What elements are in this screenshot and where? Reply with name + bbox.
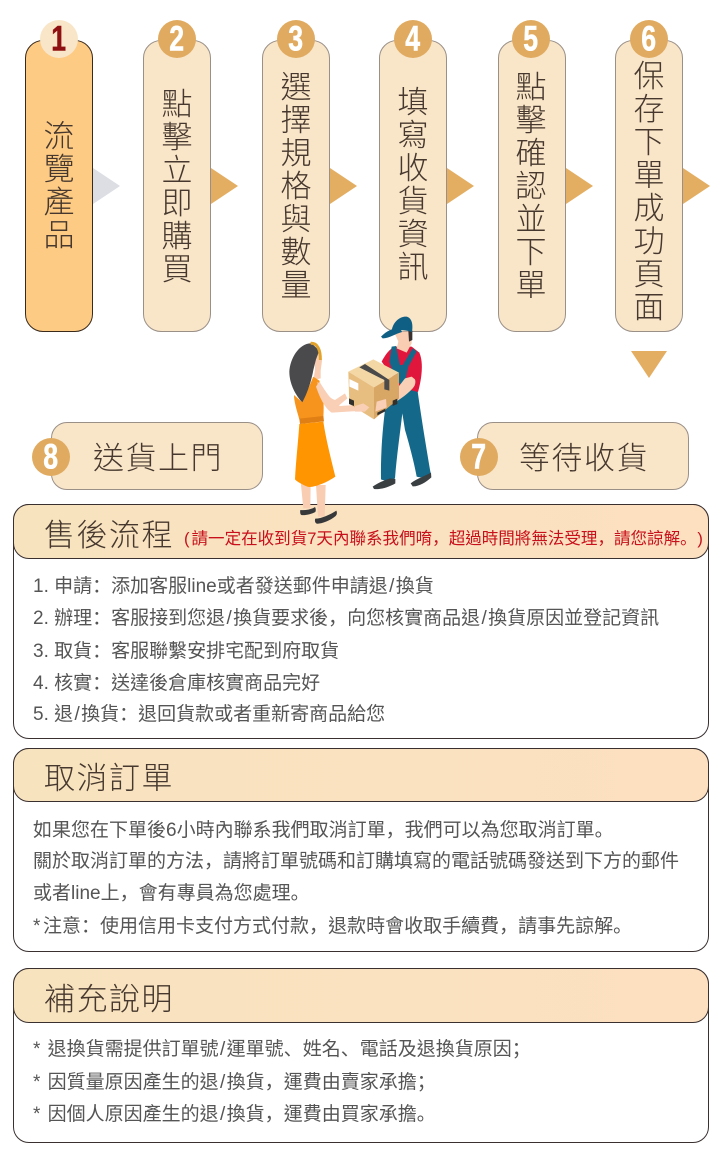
step 5 number badge bbox=[512, 20, 550, 58]
step 1 label: 產 bbox=[44, 185, 74, 220]
step 5 label: 點 bbox=[516, 70, 546, 105]
step 4 label: 寫 bbox=[398, 118, 428, 153]
step 1 label: 品 bbox=[44, 218, 74, 253]
step 3 label: 規 bbox=[280, 136, 312, 171]
cancel text line 3: 或者line上，會有專員為您處理。 bbox=[33, 883, 310, 904]
step 2 label: 購 bbox=[162, 219, 192, 254]
step 6 number badge: 6 bbox=[642, 18, 656, 58]
step 3 label: 量 bbox=[280, 268, 312, 303]
step 2 card bbox=[143, 40, 211, 332]
step 6 card bbox=[615, 40, 683, 332]
step 7: wait for delivery bbox=[460, 422, 689, 490]
step 6: order success page bbox=[615, 18, 683, 332]
note line 2: * 因質量原因產生的退/換貨，運費由賣家承擔； bbox=[33, 1072, 436, 1093]
cancel text line 1: 如果您在下單後6小時內聯系我們取消訂單，我們可以為您取消訂單。 bbox=[33, 820, 614, 841]
step 4 label: 收 bbox=[398, 151, 428, 186]
step 5 label bbox=[516, 70, 546, 303]
arrow: step 1 to 2 bbox=[93, 168, 120, 204]
step 6 label: 面 bbox=[634, 290, 664, 325]
arrow: step 3 to 4 bbox=[330, 168, 357, 204]
step list line 2: 2. 辦理：客服接到您退/換貨要求後，向您核實商品退/換貨原因並登記資訊 bbox=[33, 608, 659, 629]
step 3 number badge bbox=[277, 20, 315, 58]
after-sales header bar bbox=[13, 504, 709, 559]
step list line 3: 3. 取貨：客服聯繫安排宅配到府取貨 bbox=[33, 641, 339, 662]
step 3 label: 格 bbox=[280, 169, 312, 204]
step 4 card bbox=[379, 40, 447, 332]
step 7 card bbox=[477, 422, 689, 490]
notes header bar bbox=[13, 968, 709, 1023]
step 1: browse products bbox=[25, 18, 93, 332]
step 1 card bbox=[25, 40, 93, 332]
step 1 number badge bbox=[40, 20, 78, 58]
step 3 label: 數 bbox=[280, 235, 312, 270]
step 8: home delivery bbox=[32, 422, 263, 490]
step 4 label: 訊 bbox=[398, 250, 428, 285]
cancel text line 2: 關於取消訂單的方法，請將訂單號碼和訂購填寫的電話號碼發送到下方的郵件 bbox=[33, 851, 679, 872]
step 6 label: 下 bbox=[634, 125, 664, 160]
panel: cancel order bbox=[13, 748, 709, 952]
step 6 label bbox=[634, 59, 664, 325]
step 7 number badge bbox=[460, 438, 498, 476]
step list line 1: 1. 申請：添加客服line或者發送郵件申請退/換貨 bbox=[33, 576, 434, 597]
step 7 number badge: 7 bbox=[472, 436, 486, 476]
step 5 card bbox=[498, 40, 566, 332]
step 1 label bbox=[44, 119, 74, 253]
step 2 label: 點 bbox=[162, 87, 192, 122]
step 5: confirm order bbox=[498, 18, 566, 332]
cancel order header bar bbox=[13, 748, 709, 802]
arrow: step 2 to 3 bbox=[211, 168, 238, 204]
panel: additional notes bbox=[13, 968, 709, 1143]
step 2 label: 立 bbox=[162, 153, 192, 188]
step 5 number badge: 5 bbox=[524, 18, 538, 58]
step 5 label: 單 bbox=[516, 268, 546, 303]
step 4 label bbox=[398, 85, 428, 285]
step 6 label: 功 bbox=[634, 224, 664, 259]
step 2 label: 買 bbox=[162, 252, 192, 287]
step 4 label: 貨 bbox=[398, 184, 428, 219]
step 2 number badge: 2 bbox=[170, 18, 184, 58]
note line 1: * 退換貨需提供訂單號/運單號、姓名、電話及退換貨原因； bbox=[33, 1039, 531, 1060]
heading: after-sales process: 售後流程 bbox=[44, 518, 174, 553]
step 8 label: 送貨上門 bbox=[93, 441, 223, 476]
step 5 label: 認 bbox=[516, 169, 546, 204]
heading: additional notes: 補充說明 bbox=[44, 982, 174, 1017]
arrow: step 4 to 5 bbox=[447, 168, 474, 204]
step 5 label: 擊 bbox=[516, 103, 546, 138]
parcel box bbox=[348, 359, 399, 419]
step 2: click buy now bbox=[143, 18, 211, 332]
step 2 number badge bbox=[158, 20, 196, 58]
step 1 number badge: 1 bbox=[52, 18, 66, 58]
red notice: (請一定在收到貨7天內聯系我們唷，超過時間將無法受理，請您諒解。 ) bbox=[184, 529, 703, 548]
step 4 label: 填 bbox=[398, 85, 428, 120]
arrow: step 6 to 7 side bbox=[683, 168, 710, 204]
step 2 label: 即 bbox=[162, 186, 192, 221]
step 1 label: 覽 bbox=[44, 152, 74, 187]
step list line 4: 4. 核實：送達後倉庫核實商品完好 bbox=[33, 673, 320, 694]
step 7 label: 等待收貨 bbox=[519, 441, 649, 476]
step 8 number badge: 8 bbox=[44, 436, 58, 476]
step 3 label bbox=[280, 70, 312, 303]
step 3 number badge: 3 bbox=[289, 18, 303, 58]
courier bbox=[373, 317, 431, 489]
step 6 label: 頁 bbox=[634, 257, 664, 292]
step 5 label: 確 bbox=[516, 136, 546, 171]
woman customer bbox=[289, 343, 369, 524]
step 8 card bbox=[51, 422, 263, 490]
step 4: fill in delivery info bbox=[379, 18, 447, 332]
step 3 label: 選 bbox=[280, 70, 312, 105]
step list line 5: 5. 退/換貨：退回貨款或者重新寄商品給您 bbox=[33, 704, 385, 725]
step 6 label: 保 bbox=[634, 59, 664, 94]
step 2 label: 擊 bbox=[162, 120, 192, 155]
step 1 label: 流 bbox=[44, 119, 74, 154]
step 5 label: 下 bbox=[516, 235, 546, 270]
step 5 label: 並 bbox=[516, 202, 546, 237]
step 3 card bbox=[262, 40, 330, 332]
step 4 number badge bbox=[394, 20, 432, 58]
step 4 number badge: 4 bbox=[406, 18, 420, 58]
illustration: courier handing parcel to customer bbox=[289, 316, 432, 524]
step 8 number badge bbox=[32, 438, 70, 476]
step 2 label bbox=[162, 87, 192, 287]
note line 3: * 因個人原因產生的退/換貨，運費由買家承擔。 bbox=[33, 1104, 436, 1125]
panel: after-sales process bbox=[13, 504, 709, 739]
step 6 label: 存 bbox=[634, 92, 664, 127]
step 3 label: 與 bbox=[280, 202, 312, 237]
step 3 label: 擇 bbox=[280, 103, 312, 138]
step 6 label: 單 bbox=[634, 158, 664, 193]
cancel text line 4: *注意：使用信用卡支付方式付款，退款時會收取手續費，請事先諒解。 bbox=[33, 916, 632, 937]
step 3: choose spec and quantity bbox=[262, 18, 330, 332]
step 6 number badge bbox=[630, 20, 668, 58]
step 6 label: 成 bbox=[634, 191, 664, 226]
step 4 label: 資 bbox=[398, 217, 428, 252]
heading: cancel order: 取消訂單 bbox=[44, 761, 174, 796]
arrow: down to step 7 bbox=[631, 351, 667, 378]
arrow: step 5 to 6 bbox=[566, 168, 593, 204]
